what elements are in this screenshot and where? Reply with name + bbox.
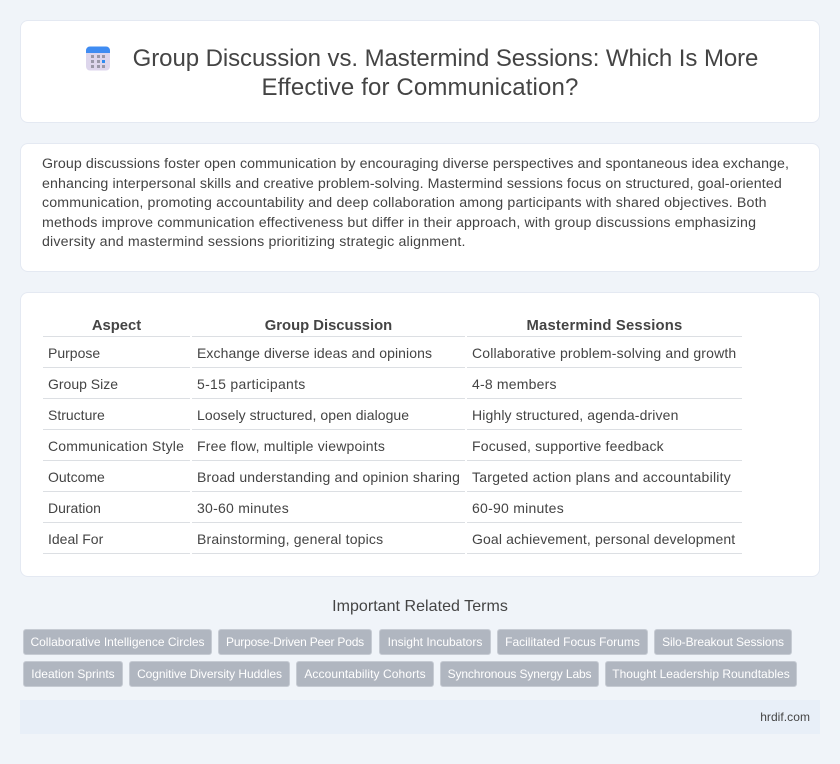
tags: Accountability Cohorts	[304, 667, 426, 681]
table: 60-90 minutes	[472, 500, 564, 516]
header card	[20, 20, 820, 123]
summary text: communication, promoting accountability and deep collaboration among participants with shared objectives. Both	[42, 195, 767, 211]
tags: Synchronous Synergy Labs	[448, 667, 591, 681]
table: Mastermind Sessions	[527, 318, 682, 334]
table: Goal achievement, personal development	[472, 531, 735, 547]
summary text: Group discussions foster open communication by encouraging diverse perspectives and spontaneous idea exchange,	[42, 156, 789, 172]
table: Brainstorming, general topics	[197, 531, 383, 547]
table: 30-60 minutes	[197, 500, 289, 516]
tags: Insight Incubators	[388, 635, 482, 649]
table: Structure	[48, 407, 105, 423]
table: Collaborative problem-solving and growth	[472, 345, 736, 361]
table: Aspect	[92, 318, 141, 334]
table: Purpose	[48, 345, 100, 361]
table: Exchange diverse ideas and opinions	[197, 345, 432, 361]
table: Targeted action plans and accountability	[472, 469, 731, 485]
table: Broad understanding and opinion sharing	[197, 469, 460, 485]
tags: Thought Leadership Roundtables	[612, 667, 790, 681]
table: Group Discussion	[265, 318, 392, 334]
icon: calendar	[86, 46, 110, 70]
tags: Collaborative Intelligence Circles	[30, 635, 205, 649]
summary text: methods improve communication effectiveness but differ in their approach, with group discussions emphasizing	[42, 214, 756, 230]
table: Group Size	[48, 376, 118, 392]
footer	[20, 700, 820, 734]
title line 2: Effective for Communication?	[262, 74, 578, 101]
table: 5-15 participants	[197, 376, 306, 392]
table: Loosely structured, open dialogue	[197, 407, 409, 423]
tags: Purpose-Driven Peer Pods	[226, 635, 364, 649]
heading: related terms: Important Related Terms	[332, 598, 508, 615]
table: Duration	[48, 500, 101, 516]
tags	[23, 629, 797, 687]
summary text: enhancing interpersonal skills and creative problem-solving. Mastermind sessions focus on structured, goal-oriented	[42, 176, 782, 192]
tags: Ideation Sprints	[31, 667, 115, 681]
table: Communication Style	[48, 438, 184, 454]
title: Group Discussion vs. Mastermind Sessions: Which Is More	[133, 45, 758, 72]
panel: comparison table	[20, 292, 820, 577]
tags: Cognitive Diversity Huddles	[137, 667, 282, 681]
tags: Facilitated Focus Forums	[505, 635, 640, 649]
footer credit: hrdif.com	[760, 710, 810, 724]
table	[43, 318, 742, 554]
summary text	[42, 156, 789, 250]
summary text: diversity and mastermind sessions prioritizing strategic alignment.	[42, 234, 466, 250]
table: Outcome	[48, 469, 105, 485]
panel: summary	[20, 143, 820, 272]
table: Free flow, multiple viewpoints	[197, 438, 385, 454]
table: Ideal For	[48, 531, 103, 547]
table: Highly structured, agenda-driven	[472, 407, 678, 423]
table: Focused, supportive feedback	[472, 438, 664, 454]
tags: Silo-Breakout Sessions	[662, 635, 784, 649]
table: 4-8 members	[472, 376, 557, 392]
